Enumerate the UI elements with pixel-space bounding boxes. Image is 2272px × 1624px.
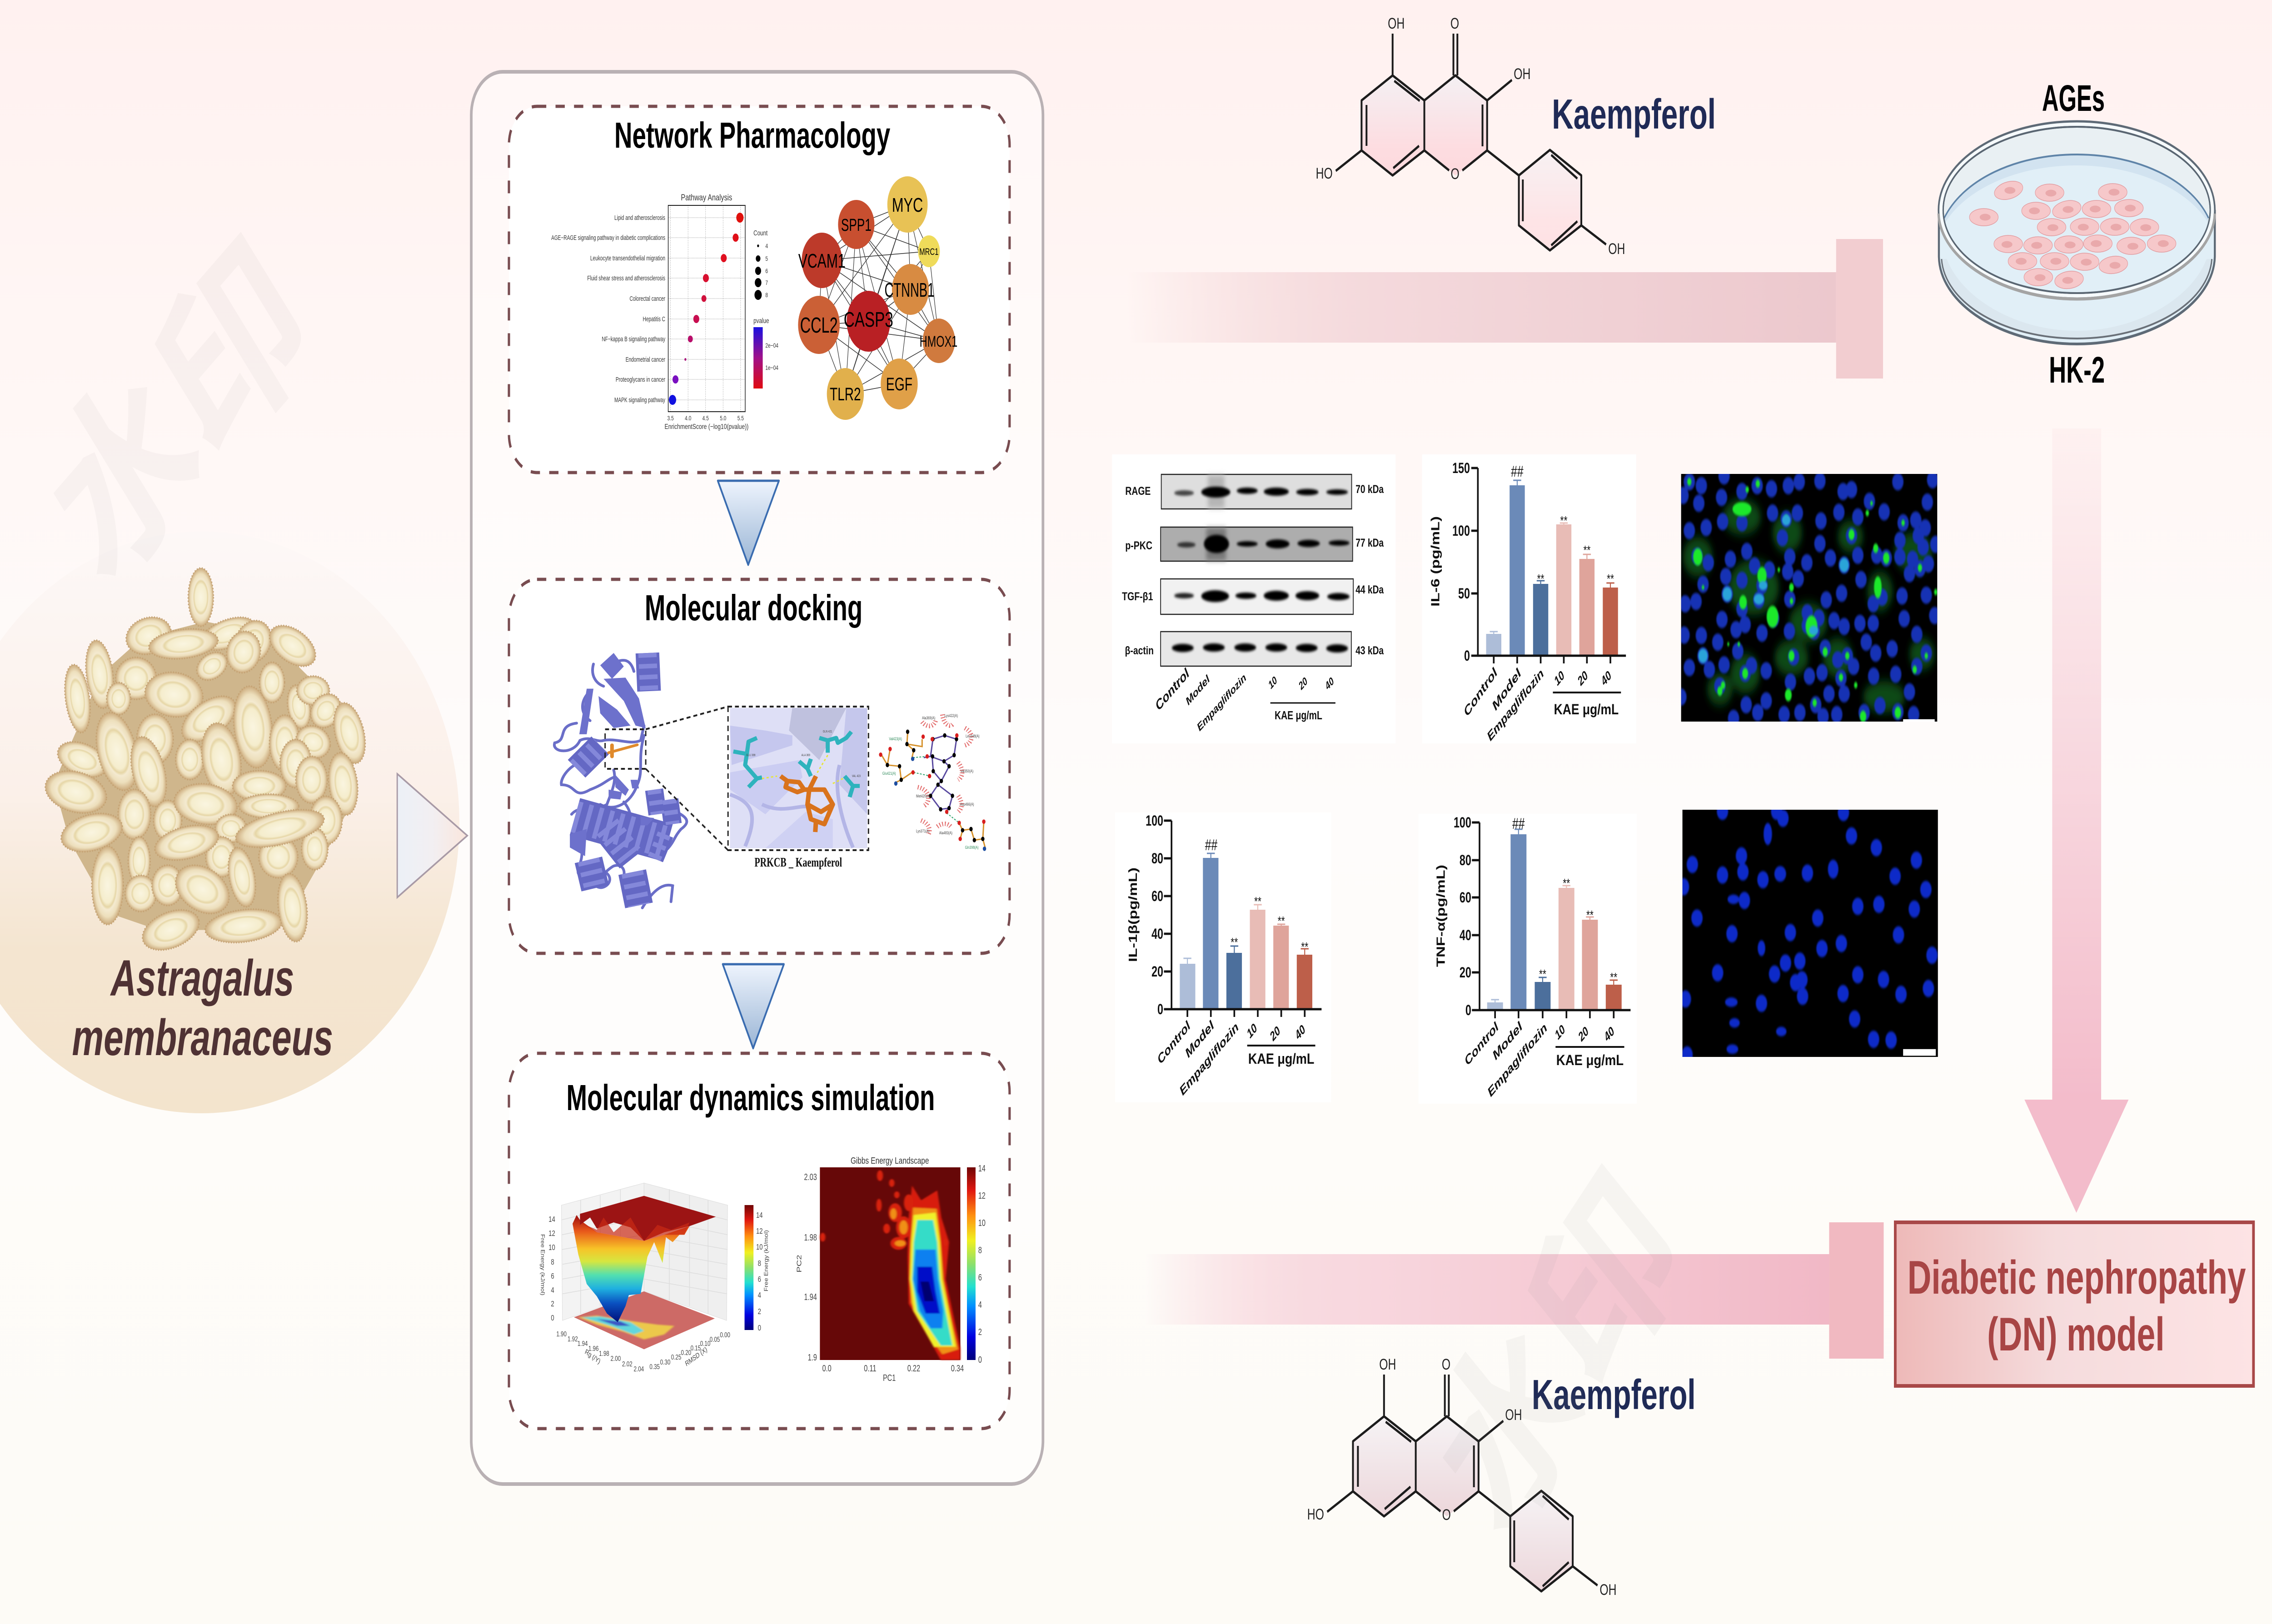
herb circle background xyxy=(0,532,459,1113)
panel: TNF-alpha bar chart: ** xyxy=(1563,877,1570,891)
chart: 3D free energy landscape: Free Energy (kJ/mol) xyxy=(763,1230,769,1291)
chart: 3D free energy landscape: 0 xyxy=(551,1314,554,1323)
arrow: network to docking xyxy=(718,481,779,565)
panel: TNF-alpha bar chart: Control xyxy=(1462,1019,1501,1068)
panel: western blot: 40 xyxy=(1323,675,1336,692)
chart: Gibbs energy landscape: 8 xyxy=(978,1245,982,1255)
box: diabetic nephropathy model xyxy=(1895,1222,2253,1386)
panel: TNF-alpha bar chart: 10 xyxy=(1553,1022,1567,1042)
chart: pathway dot plot: 3.5 xyxy=(668,414,674,422)
panel: molecular docking xyxy=(509,579,1010,953)
title: Astragalus membranaceus xyxy=(72,949,333,1066)
panel: molecular dynamics simulation xyxy=(509,1053,1010,1429)
chart: 3D free energy landscape: 2.04 xyxy=(634,1365,644,1373)
chart: protein interaction network: MRC1 xyxy=(919,246,938,257)
panel: IL-6 bar chart: Empagliflozin xyxy=(1485,667,1546,744)
chart: Gibbs energy landscape: 2 xyxy=(978,1327,982,1337)
icon: petri dish with cells xyxy=(1938,121,2215,344)
chart: Gibbs energy landscape: 14 xyxy=(978,1163,986,1174)
panel: IL-6 bar chart: 100 xyxy=(1452,523,1470,539)
panel: western blot: KAE μg/mL xyxy=(1275,708,1322,722)
panel: western blot: 77 kDa xyxy=(1355,536,1384,549)
chart: 3D free energy landscape: 1.96 xyxy=(588,1344,599,1352)
molecule: kaempferol bottom: OH xyxy=(1599,1581,1616,1599)
chart: 3D free energy landscape: RMSD (X) xyxy=(684,1345,708,1368)
panel: IL-1beta bar chart: Control xyxy=(1155,1018,1193,1067)
docking close-up: VAL 423 xyxy=(852,774,861,778)
panel: TNF-alpha bar chart: 60 xyxy=(1460,889,1471,906)
chart: 3D free energy landscape: 4 xyxy=(758,1291,761,1300)
panel: TNF-alpha bar chart: 100 xyxy=(1454,814,1471,831)
docking close-up xyxy=(728,707,868,850)
panel: TNF-alpha bar chart: Model xyxy=(1490,1019,1525,1063)
chart: pathway dot plot: 4.5 xyxy=(703,414,709,422)
chart: pathway dot plot: Count xyxy=(753,229,767,237)
chart: pathway dot plot: Leukocyte transendothelial migration xyxy=(590,254,665,262)
chart: Gibbs energy landscape: 0.11 xyxy=(864,1363,877,1374)
panel: IL-1beta bar chart: 40 xyxy=(1293,1022,1308,1043)
chart: 3D free energy landscape: 12 xyxy=(548,1229,555,1238)
blot: TGF-beta1 xyxy=(1161,579,1353,614)
chart: 3D free energy landscape: 0.15 xyxy=(691,1344,701,1352)
label: HK-2: HK-2 xyxy=(2049,349,2105,391)
panel: western blot: 70 kDa xyxy=(1355,483,1384,496)
panel: IL-1beta bar chart: Empagliflozin xyxy=(1177,1020,1241,1098)
chart: pathway dot plot: Colorectal cancer xyxy=(629,294,665,302)
panel: western blot: Empagliflozin xyxy=(1196,672,1248,733)
chart: protein interaction network: CASP3 xyxy=(844,308,893,331)
chart: Gibbs energy landscape: 12 xyxy=(978,1191,986,1201)
chart: protein interaction network: MYC xyxy=(892,194,923,216)
title: Astragalus membranaceus: membranaceus xyxy=(72,1009,333,1066)
panel: TNF-alpha bar chart: ## xyxy=(1512,815,1525,832)
panel: TNF-alpha bar chart: Empagliflozin xyxy=(1485,1021,1550,1100)
chart: 3D free energy landscape: 0.20 xyxy=(681,1348,691,1356)
ligplot interaction map: Glu421(A) xyxy=(882,771,896,776)
molecule: kaempferol top: O xyxy=(1450,15,1459,32)
chart: Gibbs energy landscape: 2.03 xyxy=(804,1172,817,1182)
icon: protein ribbon xyxy=(554,653,687,908)
chart: 3D free energy landscape: 0 xyxy=(758,1324,761,1333)
molecule: kaempferol bottom: OH xyxy=(1505,1406,1522,1424)
chart: pathway dot plot xyxy=(551,193,778,430)
panel: TNF-alpha bar chart: TNF-α(pg/mL) xyxy=(1434,865,1447,967)
chart: pathway dot plot: Pathway Analysis xyxy=(681,193,732,203)
panel: TNF-alpha bar chart: ** xyxy=(1539,967,1546,981)
heading: network pharmacology: Network Pharmacology xyxy=(614,115,890,155)
chart: pathway dot plot: 6 xyxy=(765,267,768,274)
panel: IL-6 bar chart: IL-6 (pg/mL) xyxy=(1429,516,1442,607)
panel: IL-6 bar chart: 0 xyxy=(1464,648,1470,664)
panel: TNF-alpha bar chart: 20 xyxy=(1576,1024,1591,1045)
chart: Gibbs energy landscape: PC1 xyxy=(883,1373,896,1383)
panel: western blot: Model xyxy=(1184,673,1212,707)
chart: 3D free energy landscape: 6 xyxy=(758,1275,761,1284)
panel: network pharmacology xyxy=(509,106,1010,473)
panel: IL-6 bar chart: 20 xyxy=(1575,668,1590,689)
panel: western blot: 43 kDa xyxy=(1355,644,1384,657)
panel: western blot: β-actin xyxy=(1125,644,1154,657)
panel: IL-6 bar chart: ** xyxy=(1583,543,1591,558)
chart: pathway dot plot: Lipid and atherosclerosis xyxy=(614,214,665,221)
panel: IL-1beta bar chart: 100 xyxy=(1146,812,1163,829)
chart: protein interaction network: SPP1 xyxy=(841,216,872,235)
docking close-up: GLU 399 xyxy=(746,753,756,757)
chart: 3D free energy landscape: 2.02 xyxy=(622,1360,633,1368)
chart: pathway dot plot: 2e−04 xyxy=(765,342,778,349)
chart: Gibbs energy landscape: 1.94 xyxy=(804,1292,817,1302)
molecule: kaempferol top: OH xyxy=(1514,65,1530,83)
chart: Gibbs energy landscape: 6 xyxy=(978,1272,982,1283)
chart: protein interaction network: CCL2 xyxy=(800,313,838,337)
panel: methods container xyxy=(471,72,1043,1484)
chart: 3D free energy landscape: 0.10 xyxy=(700,1339,710,1347)
docking close-up: GLN 421 xyxy=(823,730,832,733)
chart: pathway dot plot: 7 xyxy=(765,279,768,286)
ligplot interaction map: Ala483(A) xyxy=(939,831,952,835)
panel: IL-1beta bar chart: ** xyxy=(1301,940,1309,954)
chart: 3D free energy landscape: 1.98 xyxy=(599,1349,609,1357)
panel: TNF-alpha bar chart: 0 xyxy=(1465,1002,1471,1018)
panel: IL-6 bar chart: 40 xyxy=(1599,668,1614,689)
panel: IL-1beta bar chart xyxy=(1115,812,1331,1102)
molecule: kaempferol bottom: O xyxy=(1442,1356,1450,1373)
panel: western blot: 10 xyxy=(1266,674,1279,691)
blot: beta-actin xyxy=(1161,632,1351,666)
chart: 3D free energy landscape: 0.35 xyxy=(649,1362,660,1370)
panel: western blot: RAGE xyxy=(1125,484,1151,498)
panel: western blot: p-PKC xyxy=(1125,539,1152,552)
panel: IL-1beta bar chart: 20 xyxy=(1151,963,1163,980)
chart: 3D free energy landscape: Rg (/Y) xyxy=(584,1347,602,1365)
image: fluorescence model group xyxy=(1675,467,1942,727)
molecule: kaempferol top: HO xyxy=(1316,165,1333,182)
ligplot interaction map: Ala369(A) xyxy=(922,716,935,720)
ligplot interaction map: Val350(A) xyxy=(960,769,973,773)
icon: astragalus slices photo xyxy=(43,568,371,957)
chart: pathway dot plot: pvalue xyxy=(753,316,769,324)
chart: 3D free energy landscape: 10 xyxy=(756,1243,763,1252)
arrow: kaempferol to HK-2 xyxy=(1127,239,1883,379)
locator box on protein xyxy=(605,707,728,850)
panel: IL-6 bar chart xyxy=(1422,454,1636,744)
panel: TNF-alpha bar chart: 80 xyxy=(1460,852,1471,868)
panel: IL-6 bar chart: Model xyxy=(1490,666,1524,713)
panel: IL-6 bar chart: ## xyxy=(1511,463,1524,480)
ligplot interaction map: Lys422(A) xyxy=(945,713,958,718)
panel: IL-1beta bar chart: 10 xyxy=(1245,1021,1260,1041)
panel: IL-6 bar chart: 50 xyxy=(1458,585,1470,602)
chart: 3D free energy landscape: Free Energy (kJ/mol) xyxy=(540,1234,546,1295)
chart: Gibbs energy landscape: 4 xyxy=(978,1300,982,1310)
chart: 3D free energy landscape: 1.92 xyxy=(568,1335,578,1343)
molecule: kaempferol top xyxy=(1316,15,1625,258)
label: Kaempferol top: Kaempferol xyxy=(1552,91,1716,138)
ligplot interaction map: Asp466(A) xyxy=(960,802,974,807)
label: PRKCB Kaempferol: PRKCB _ Kaempferol xyxy=(754,856,842,870)
molecule: kaempferol bottom: HO xyxy=(1307,1506,1324,1523)
arrow: kaempferol to DN model xyxy=(1145,1222,1883,1359)
ligplot interaction map: Met420(A) xyxy=(916,794,930,798)
chart: 3D free energy landscape: 12 xyxy=(756,1227,763,1236)
heading: molecular dynamics simulation: Molecular dynamics simulation xyxy=(567,1077,935,1118)
panel: IL-1beta bar chart: ## xyxy=(1205,837,1218,854)
chart: pathway dot plot: Hepatitis C xyxy=(643,315,665,323)
chart: pathway dot plot: MAPK signaling pathway xyxy=(614,396,665,404)
panel: western blot: 44 kDa xyxy=(1355,583,1384,596)
panel: TNF-alpha bar chart: ** xyxy=(1586,908,1594,922)
molecule: kaempferol bottom: OH xyxy=(1379,1356,1396,1373)
chart: 3D free energy landscape: 0.05 xyxy=(710,1335,720,1343)
panel: IL-6 bar chart: ** xyxy=(1607,572,1614,586)
chart: 3D free energy landscape: 8 xyxy=(551,1258,554,1267)
panel: western blot xyxy=(1112,454,1395,743)
panel: western blot: TGF-β1 xyxy=(1122,590,1153,603)
panel: IL-1beta bar chart: 40 xyxy=(1151,926,1163,942)
chart: pathway dot plot: 5.5 xyxy=(737,414,744,422)
chart: protein interaction network: TLR2 xyxy=(830,384,861,404)
molecule: kaempferol bottom: O xyxy=(1442,1506,1451,1524)
panel: IL-1beta bar chart: 80 xyxy=(1151,850,1163,867)
bars: IL-1beta xyxy=(1180,853,1312,1009)
panel: IL-1beta bar chart: KAE μg/mL xyxy=(1248,1051,1314,1067)
chart: pathway dot plot: 5.0 xyxy=(720,414,727,422)
panel: TNF-alpha bar chart: KAE μg/mL xyxy=(1556,1052,1624,1068)
label: Kaempferol bottom: Kaempferol xyxy=(1532,1371,1696,1419)
chart: 3D free energy landscape: 2 xyxy=(551,1300,554,1309)
chart: 3D free energy landscape: 0.00 xyxy=(720,1330,730,1339)
bars: TNF-alpha xyxy=(1487,829,1622,1010)
chart: protein interaction network: VCAM1 xyxy=(798,250,846,272)
ligplot interaction map: Gln398(A) xyxy=(965,845,979,850)
panel: IL-1beta bar chart: ** xyxy=(1278,914,1285,928)
arrow: docking to simulation xyxy=(723,964,784,1048)
chart: protein interaction network: HMOX1 xyxy=(920,333,957,350)
molecule: kaempferol top: OH xyxy=(1608,240,1625,258)
chart: 3D free energy landscape: 6 xyxy=(551,1272,554,1281)
chart: 3D free energy landscape: 0.25 xyxy=(671,1353,681,1361)
arrow: HK-2 to DN model xyxy=(2024,428,2128,1213)
title: Astragalus membranaceus: Astragalus xyxy=(110,949,294,1006)
chart: 3D free energy landscape: 2 xyxy=(758,1307,761,1316)
chart: pathway dot plot: NF−kappa B signaling pathway xyxy=(602,335,665,343)
chart: 3D free energy landscape: 1.94 xyxy=(578,1339,588,1347)
chart: 3D free energy landscape: 10 xyxy=(548,1243,555,1252)
chart: 3D free energy landscape: 8 xyxy=(758,1259,761,1268)
label: diabetic nephropathy: Diabetic nephropathy xyxy=(1908,1251,2246,1304)
chart: Gibbs energy landscape: 0 xyxy=(978,1355,982,1365)
blot: RAGE xyxy=(1161,474,1352,509)
chart: Gibbs energy landscape: 1.98 xyxy=(804,1232,817,1243)
molecule: kaempferol bottom xyxy=(1307,1356,1616,1599)
ligplot interaction map: Leu348(A) xyxy=(966,734,980,738)
heading: molecular docking: Molecular docking xyxy=(645,588,862,628)
panel: IL-6 bar chart: KAE μg/mL xyxy=(1554,701,1619,717)
panel: western blot: 20 xyxy=(1297,675,1310,692)
ligplot interaction map: Lys371(A) xyxy=(916,829,930,833)
image: fluorescence treated group xyxy=(1678,803,1938,1064)
chart: pathway dot plot: 8 xyxy=(765,291,768,299)
chart: pathway dot plot: 4.0 xyxy=(685,414,691,422)
chart: pathway dot plot: 1e−04 xyxy=(765,364,778,371)
panel: TNF-alpha bar chart: 20 xyxy=(1460,964,1471,981)
panel: IL-6 bar chart: Control xyxy=(1462,665,1500,719)
panel: IL-6 bar chart: 10 xyxy=(1552,668,1567,688)
chart: 3D free energy landscape: 4 xyxy=(551,1286,554,1295)
panel: IL-6 bar chart: 150 xyxy=(1452,460,1470,476)
panel: TNF-alpha bar chart: 40 xyxy=(1460,927,1471,943)
panel: IL-1beta bar chart: 60 xyxy=(1151,888,1163,904)
panel: IL-1beta bar chart: IL-1β(pg/mL) xyxy=(1126,867,1140,962)
panel: IL-1beta bar chart: 0 xyxy=(1157,1001,1163,1017)
chart: Gibbs energy landscape: 0.0 xyxy=(822,1363,832,1374)
molecule: kaempferol top: O xyxy=(1451,165,1460,183)
label: DN model: (DN) model xyxy=(1987,1308,2165,1361)
chart: pathway dot plot: AGE−RAGE signaling pathway in diabetic complications xyxy=(551,234,665,241)
chart: 3D free energy landscape: 1.90 xyxy=(556,1330,567,1338)
chart: Gibbs energy landscape: 0.22 xyxy=(907,1363,920,1374)
molecule: kaempferol top: OH xyxy=(1388,15,1405,32)
watermark: bottom right: 水印 xyxy=(1379,1103,1722,1583)
panel: western blot: Control xyxy=(1153,665,1192,713)
bars: IL-6 xyxy=(1486,480,1618,656)
chart: 3D free energy landscape: 14 xyxy=(548,1215,555,1224)
chart: 3D free energy landscape: 2.00 xyxy=(611,1354,621,1362)
panel: IL-6 bar chart: ** xyxy=(1560,514,1568,528)
blot: p-PKC xyxy=(1161,527,1353,561)
panel: IL-1beta bar chart: ** xyxy=(1254,895,1261,909)
chart: Gibbs energy landscape: PC2 xyxy=(795,1255,803,1272)
chart: 3D free energy landscape: 0.30 xyxy=(660,1358,670,1366)
docking close-up: ALA 369 xyxy=(802,753,810,757)
panel: IL-1beta bar chart: 20 xyxy=(1268,1024,1283,1044)
chart: 3D free energy landscape xyxy=(540,1183,769,1373)
panel: IL-1beta bar chart: ** xyxy=(1231,936,1238,950)
panel: IL-6 bar chart: ** xyxy=(1537,572,1545,586)
chart: Gibbs energy landscape: 0.34 xyxy=(951,1363,964,1374)
panel: TNF-alpha bar chart: 40 xyxy=(1602,1024,1617,1045)
ligplot interaction map: Val423(A) xyxy=(889,737,902,741)
chart: Gibbs energy landscape: Gibbs Energy Landscape xyxy=(851,1156,929,1166)
ligplot interaction map xyxy=(879,713,986,851)
chart: pathway dot plot: Endometrial cancer xyxy=(626,355,665,363)
chart: protein interaction network: CTNNB1 xyxy=(885,279,934,301)
chart: protein interaction network: EGF xyxy=(886,374,912,394)
chart: Gibbs energy landscape: 1.9 xyxy=(808,1352,817,1363)
chart: pathway dot plot: 5 xyxy=(765,255,768,262)
chart: pathway dot plot: Proteoglycans in cancer xyxy=(616,375,665,383)
chart: pathway dot plot: Fluid shear stress and atherosclerosis xyxy=(587,274,665,282)
chart: Gibbs energy landscape: 10 xyxy=(978,1218,986,1228)
watermark: top left: 水印 xyxy=(0,166,347,634)
chart: pathway dot plot: EnrichmentScore (−log10(pvalue)) xyxy=(665,422,748,430)
arrow: herb to panel xyxy=(397,774,467,897)
panel: TNF-alpha bar chart xyxy=(1418,814,1637,1104)
panel: TNF-alpha bar chart: ** xyxy=(1610,971,1618,985)
chart: protein interaction network xyxy=(798,176,957,420)
chart: 3D free energy landscape: 14 xyxy=(756,1211,763,1220)
chart: Gibbs energy landscape xyxy=(795,1156,986,1383)
label: AGEs: AGEs xyxy=(2042,78,2105,119)
panel: IL-1beta bar chart: Model xyxy=(1183,1018,1217,1061)
chart: pathway dot plot: 4 xyxy=(765,242,768,249)
